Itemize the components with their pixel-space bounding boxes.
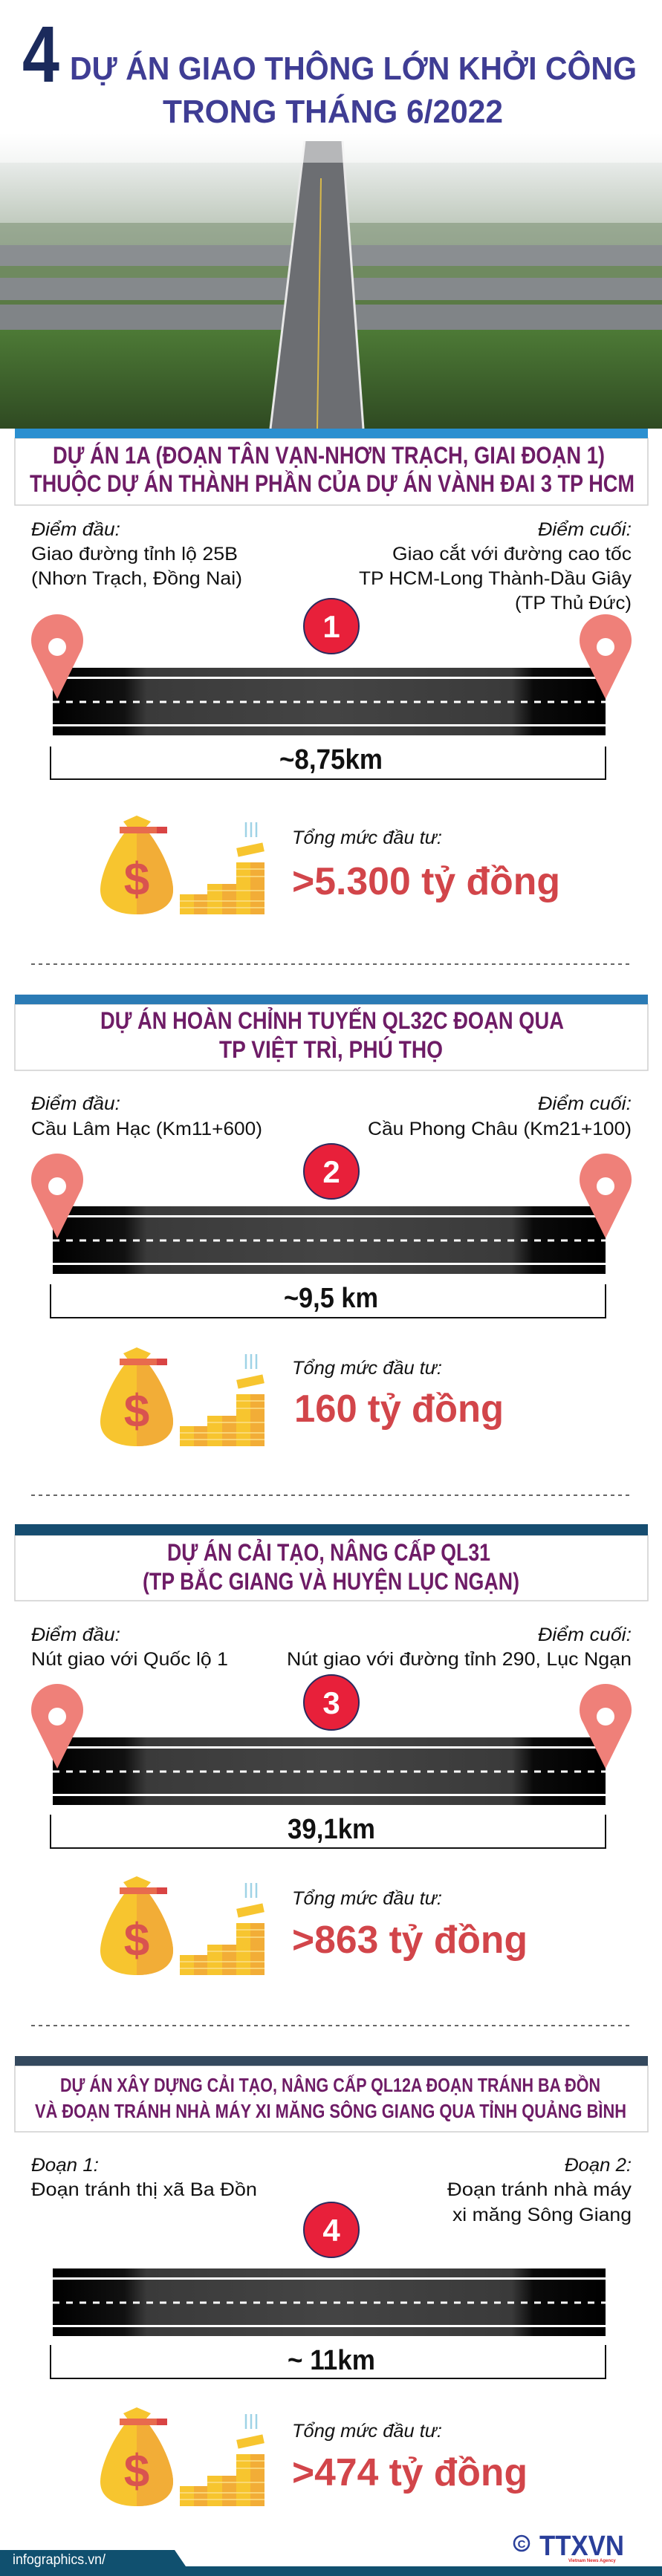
number badge 1: 1 bbox=[322, 609, 340, 644]
logo: TTXVN: C bbox=[518, 2538, 526, 2551]
header box 3: (TP BẮC GIANG VÀ HUYỆN LỤC NGẠN) bbox=[143, 1568, 519, 1595]
number badge 3 bbox=[304, 1675, 359, 1730]
pins 3 bbox=[31, 1684, 632, 1769]
segment 2 text bbox=[447, 2155, 632, 2225]
investment 2: Tổng mức đầu tư: bbox=[292, 1358, 442, 1379]
investment 2 bbox=[292, 1358, 504, 1431]
footer bbox=[0, 2550, 662, 2576]
icon: money bag and coins 3 bbox=[100, 1876, 265, 1975]
header box 1 bbox=[15, 429, 648, 505]
header box 2: TP VIỆT TRÌ, PHÚ THỌ bbox=[219, 1036, 443, 1063]
road 1 bbox=[53, 668, 606, 735]
investment 1 bbox=[292, 827, 560, 903]
start point text 3: Nút giao với Quốc lộ 1 bbox=[31, 1649, 228, 1670]
start point text 3 bbox=[31, 1624, 228, 1670]
number badge 4: 4 bbox=[322, 2213, 340, 2248]
end point text 3: Nút giao với đường tỉnh 290, Lục Ngạn bbox=[287, 1649, 632, 1670]
end point text 1: Giao cắt với đường cao tốc bbox=[392, 543, 632, 565]
investment 1: >5.300 tỷ đồng bbox=[292, 860, 560, 903]
title line 1: DỰ ÁN GIAO THÔNG LỚN KHỞI CÔNG bbox=[70, 49, 637, 87]
logo: TTXVN: Vietnam News Agency bbox=[568, 2559, 616, 2563]
investment 3: >863 tỷ đồng bbox=[292, 1919, 528, 1962]
title line 2: TRONG THÁNG 6/2022 bbox=[163, 93, 503, 130]
end point text 2 bbox=[368, 1093, 632, 1139]
start point text 3: Điểm đầu: bbox=[31, 1624, 120, 1645]
segment 2 text: xi măng Sông Giang bbox=[452, 2205, 632, 2225]
end point text 1 bbox=[359, 519, 632, 614]
title number 4: 4 bbox=[22, 9, 59, 99]
end point text 1: (TP Thủ Đức) bbox=[515, 593, 632, 614]
investment 4: Tổng mức đầu tư: bbox=[292, 2421, 442, 2442]
end point text 1: Điểm cuối: bbox=[538, 519, 632, 540]
end point text 1: TP HCM-Long Thành-Dầu Giây bbox=[359, 568, 632, 589]
header box 3: DỰ ÁN CẢI TẠO, NÂNG CẤP QL31 bbox=[167, 1539, 490, 1566]
number badge 2 bbox=[304, 1144, 359, 1199]
logo: TTXVN: TTXVN bbox=[539, 2531, 624, 2562]
investment 3: Tổng mức đầu tư: bbox=[292, 1888, 442, 1909]
start point text 1: (Nhơn Trạch, Đồng Nai) bbox=[31, 568, 242, 589]
icon: money bag and coins 4 bbox=[100, 2407, 265, 2506]
icon: money bag and coins 2 bbox=[100, 1347, 265, 1446]
logo: TTXVN bbox=[514, 2531, 624, 2563]
photo: highway overpass bbox=[0, 133, 662, 429]
header box 2 bbox=[15, 995, 648, 1070]
panel: project 4 bbox=[15, 2056, 648, 2506]
segment 1 text bbox=[31, 2155, 257, 2200]
segment 1 text: Đoạn tránh thị xã Ba Đồn bbox=[31, 2179, 257, 2200]
segment 2 text: Đoạn 2: bbox=[565, 2155, 632, 2176]
end point text 3: Điểm cuối: bbox=[538, 1624, 632, 1645]
panel: project 2 bbox=[15, 995, 648, 1446]
investment 1: Tổng mức đầu tư: bbox=[292, 827, 442, 848]
investment 4 bbox=[292, 2421, 528, 2494]
start point text 1 bbox=[31, 519, 242, 589]
road 2 bbox=[53, 1206, 606, 1274]
pins 2 bbox=[31, 1154, 632, 1238]
length bracket 2: ~9,5 km bbox=[284, 1283, 378, 1314]
number badge 1 bbox=[304, 599, 359, 654]
road 3 bbox=[53, 1737, 606, 1805]
investment 2: 160 tỷ đồng bbox=[294, 1388, 504, 1431]
header box 4 bbox=[15, 2056, 648, 2132]
start point text 2: Cầu Lâm Hạc (Km11+600) bbox=[31, 1119, 262, 1139]
length bracket 4 bbox=[51, 2345, 606, 2378]
investment 3 bbox=[292, 1888, 528, 1962]
panel: project 1 bbox=[15, 429, 648, 914]
length bracket 4: ~ 11km bbox=[288, 2345, 375, 2376]
icon: money bag and coins 1 bbox=[100, 816, 265, 914]
start point text 2: Điểm đầu: bbox=[31, 1093, 120, 1114]
segment 1 text: Đoạn 1: bbox=[31, 2155, 99, 2176]
pins 1 bbox=[31, 614, 632, 699]
number badge 3: 3 bbox=[322, 1685, 340, 1720]
length bracket 2 bbox=[51, 1283, 606, 1318]
start point text 1: Điểm đầu: bbox=[31, 519, 120, 540]
length bracket 1: ~8,75km bbox=[279, 744, 383, 775]
length bracket 1 bbox=[51, 744, 606, 779]
footer: infographics.vn/ bbox=[13, 2552, 106, 2568]
segment 2 text: Đoạn tránh nhà máy bbox=[447, 2179, 632, 2200]
investment 4: >474 tỷ đồng bbox=[292, 2451, 528, 2494]
start point text 1: Giao đường tỉnh lộ 25B bbox=[31, 544, 238, 565]
number badge 4 bbox=[304, 2202, 359, 2257]
road 4 bbox=[53, 2268, 606, 2336]
header box 3 bbox=[15, 1524, 648, 1601]
panel: project 3 bbox=[15, 1524, 648, 1975]
header box 2: DỰ ÁN HOÀN CHỈNH TUYẾN QL32C ĐOẠN QUA bbox=[100, 1007, 564, 1034]
end point text 3 bbox=[287, 1624, 632, 1670]
end point text 2: Cầu Phong Châu (Km21+100) bbox=[368, 1119, 632, 1139]
number badge 2: 2 bbox=[322, 1154, 340, 1189]
end point text 2: Điểm cuối: bbox=[538, 1093, 632, 1114]
length bracket 3 bbox=[51, 1814, 606, 1848]
title bbox=[22, 9, 637, 130]
start point text 2 bbox=[31, 1093, 262, 1139]
length bracket 3: 39,1km bbox=[288, 1814, 375, 1845]
